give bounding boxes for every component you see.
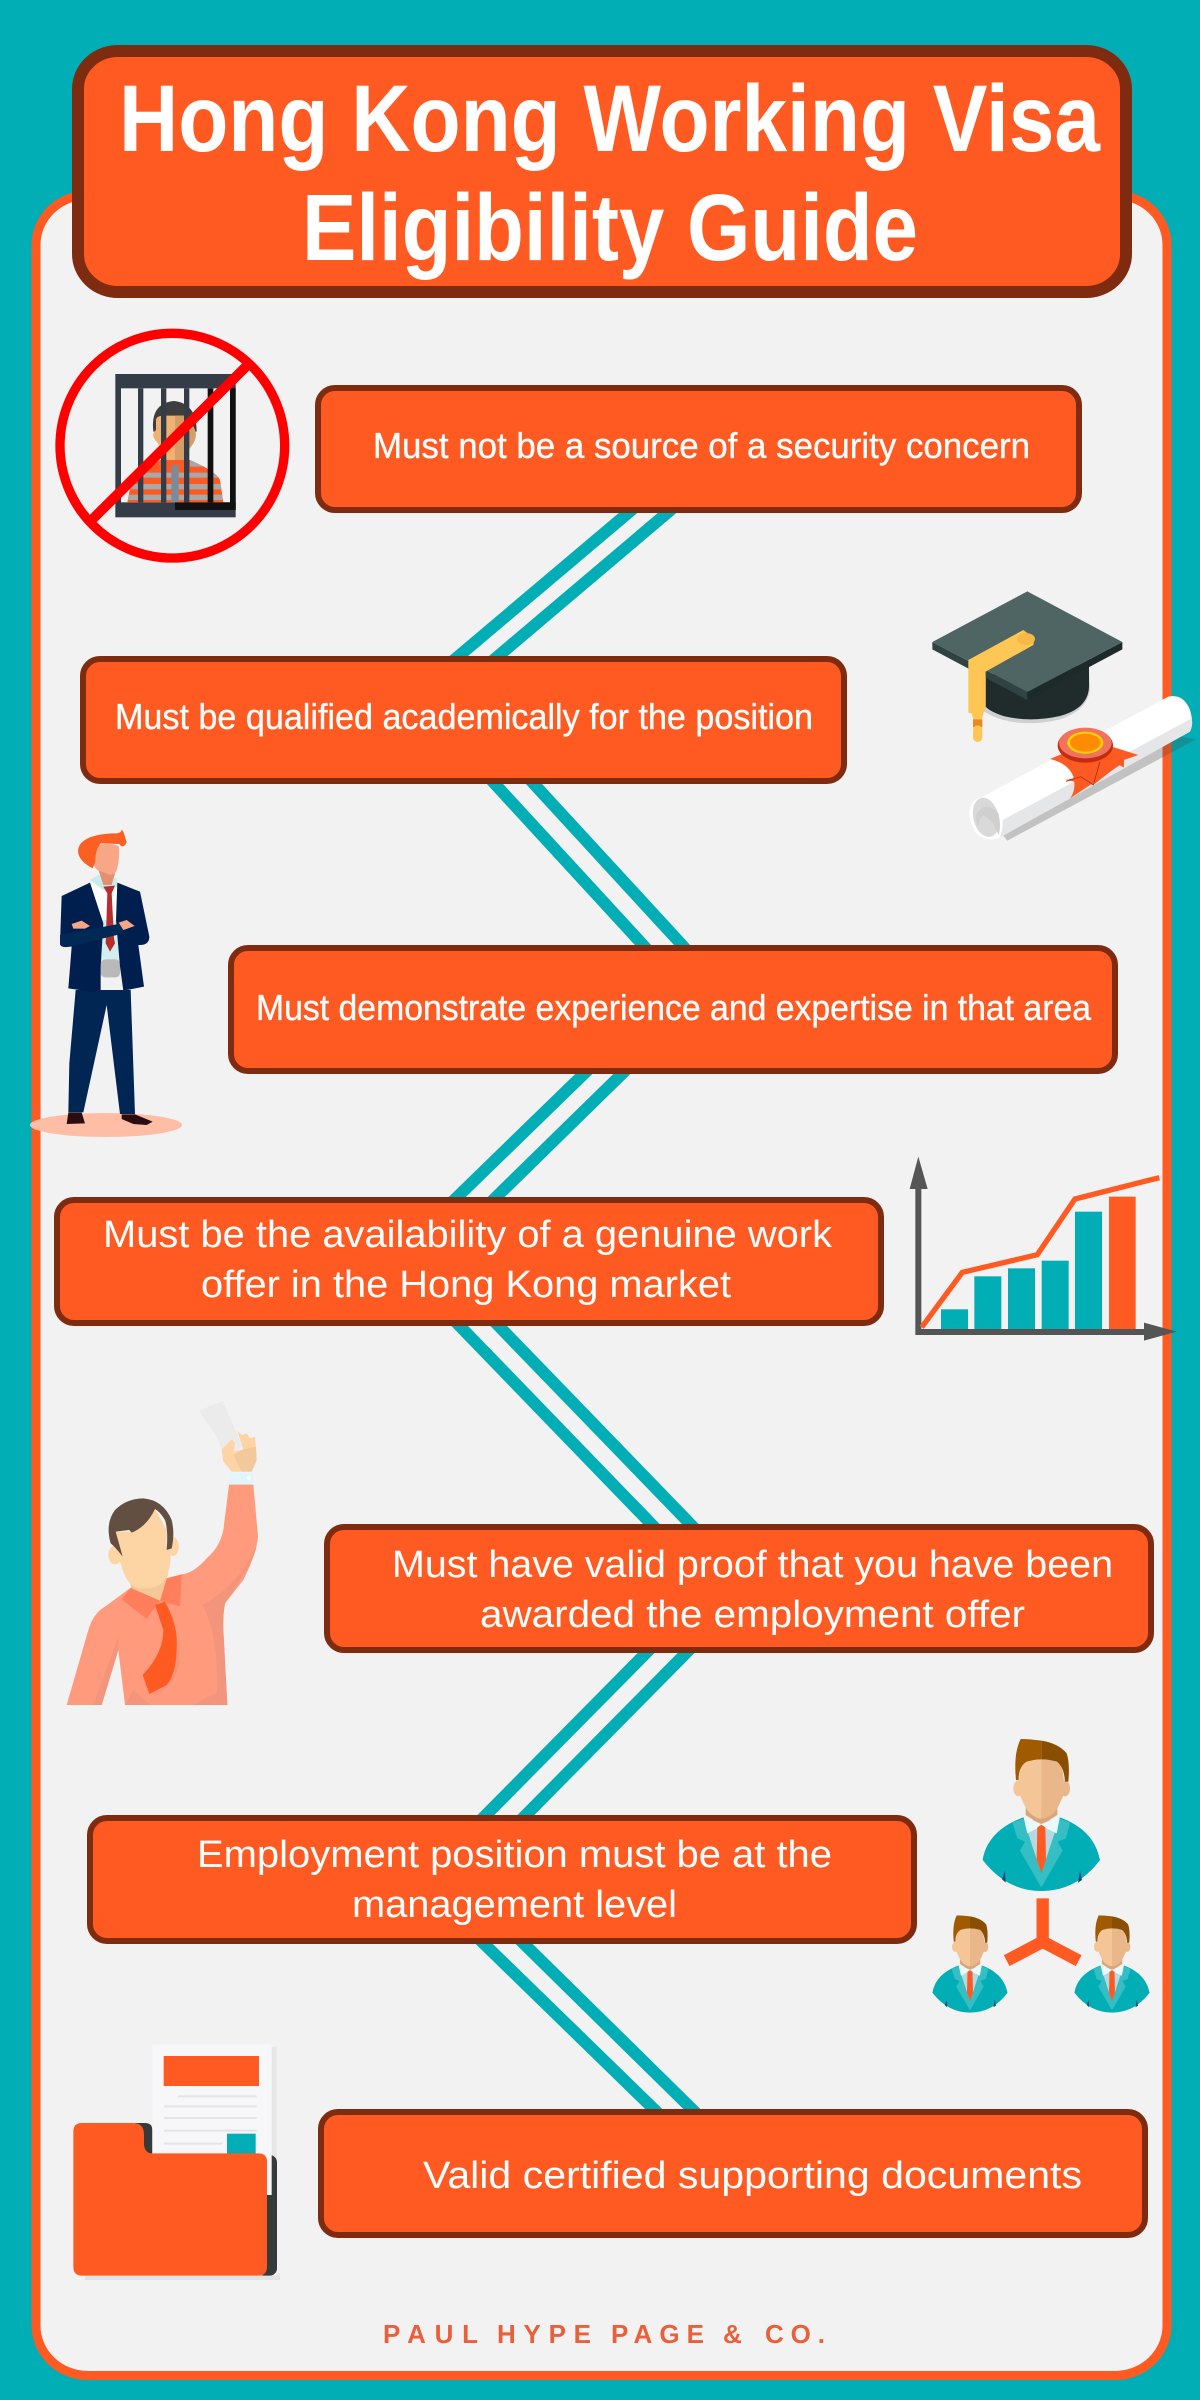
step 6 box — [90, 1818, 914, 1941]
footer brand: PAGE — [611, 2319, 704, 2349]
step 5 box — [327, 1527, 1151, 1650]
step 5 box: awarded the employment offer — [480, 1594, 1025, 1636]
step 3 box — [231, 948, 1115, 1071]
step 7 box: Valid certified supporting documents — [423, 2155, 1082, 2197]
icon: man holding up paper — [67, 1401, 258, 1705]
step 4 box: offer in the Hong Kong market — [201, 1264, 731, 1306]
step 5 box: Must have valid proof that you have been — [392, 1544, 1113, 1586]
step 3 box: Must demonstrate experience and expertise in that area — [256, 987, 1092, 1028]
footer brand: CO. — [765, 2319, 825, 2349]
step 1 box — [318, 388, 1079, 510]
step 4 box — [57, 1200, 881, 1323]
connector lines — [449, 505, 700, 2117]
step 2 box: Must be qualified academically for the position — [115, 696, 813, 737]
step 4 box: Must be the availability of a genuine work — [103, 1214, 833, 1256]
step 2 box — [83, 659, 844, 781]
step 1 box: Must not be a source of a security concern — [373, 425, 1030, 466]
title banner — [78, 51, 1126, 292]
icon: prisoner with prohibition sign — [60, 333, 285, 558]
icon: graduation cap and diploma — [932, 591, 1196, 841]
footer brand: HYPE — [497, 2319, 591, 2349]
footer brand: & — [723, 2319, 742, 2349]
icon: businessman with crossed arms — [30, 829, 182, 1137]
title text: Eligibility Guide — [302, 175, 918, 281]
icon: growth chart — [910, 1157, 1177, 1341]
step 7 box — [321, 2112, 1145, 2235]
step 6 box: management level — [352, 1884, 677, 1926]
step 6 box: Employment position must be at the — [197, 1834, 832, 1876]
footer brand: PAUL — [383, 2319, 478, 2349]
icon: management hierarchy — [932, 1739, 1150, 2013]
icon: folder with document — [73, 2044, 280, 2280]
